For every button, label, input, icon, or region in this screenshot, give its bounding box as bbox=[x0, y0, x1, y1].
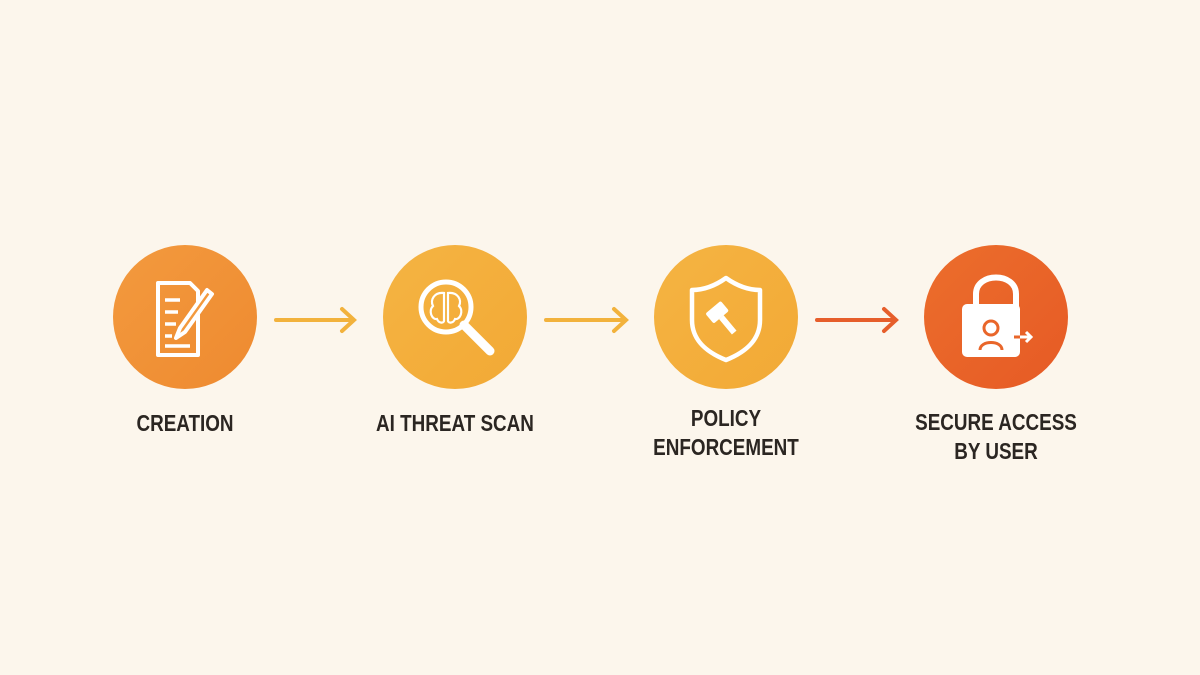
label: ai threat scan: AI THREAT SCAN bbox=[376, 410, 534, 436]
label: secure access by user bbox=[915, 409, 1077, 464]
label: policy enforcement bbox=[653, 405, 799, 460]
label: policy enforcement: ENFORCEMENT bbox=[653, 434, 799, 460]
arrow 3 bbox=[817, 309, 896, 331]
step 3: policy enforcement icon bbox=[654, 245, 798, 389]
label: secure access by user: SECURE ACCESS bbox=[915, 409, 1077, 435]
label: policy enforcement: POLICY bbox=[691, 405, 761, 431]
step 2: AI threat scan icon bbox=[383, 245, 527, 389]
label: secure access by user: BY USER bbox=[954, 438, 1038, 464]
arrow 1 bbox=[276, 309, 354, 331]
step 4: secure access icon bbox=[924, 245, 1068, 389]
label: creation: CREATION bbox=[136, 410, 234, 436]
arrow 2 bbox=[546, 309, 626, 331]
step 1: creation icon bbox=[113, 245, 257, 389]
